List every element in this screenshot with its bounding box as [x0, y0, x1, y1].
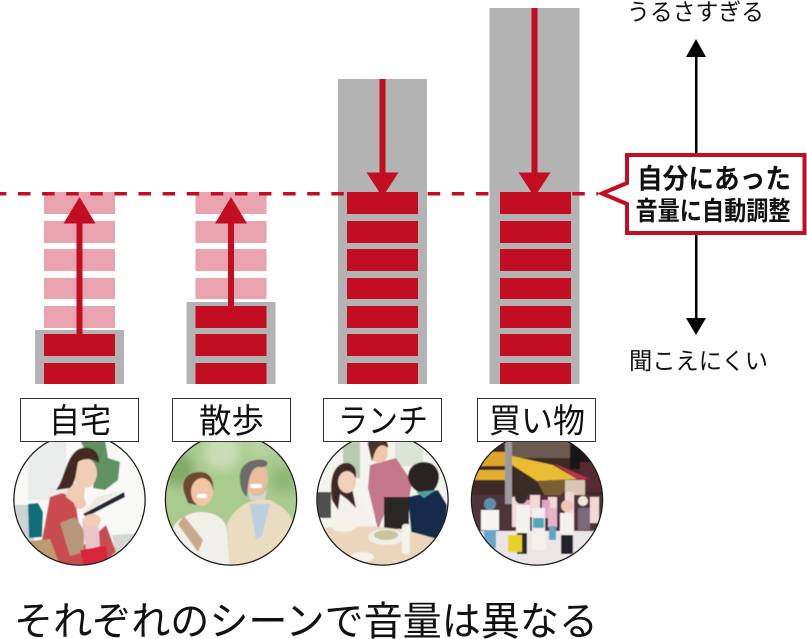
label: home: 自宅 [49, 404, 111, 440]
label: home [20, 398, 138, 442]
arrow: lunch volume down [366, 79, 398, 197]
arrow: home volume up [64, 197, 96, 334]
label: walk: 散歩 [199, 404, 264, 440]
photo: shopping street crowd [471, 434, 605, 566]
arrow: walk volume up [215, 197, 247, 306]
photo: couple walking [164, 442, 298, 566]
label: shopping: 買い物 [489, 404, 585, 440]
bar: home (自宅) [35, 192, 124, 384]
photo: woman reading at home [14, 434, 145, 570]
arrow: shopping volume down [518, 8, 550, 197]
bar: shopping (買い物) [490, 8, 580, 384]
callout: auto adjust: 自分にあった [637, 163, 791, 194]
bar: lunch (ランチ) [338, 79, 427, 384]
bar: walk (散歩) [186, 192, 276, 384]
axis label: hard to hear: 聞こえにくい [629, 348, 768, 374]
label: walk [172, 398, 290, 442]
label: lunch: ランチ [338, 404, 428, 440]
photo: lunch at a restaurant [317, 434, 448, 566]
callout: auto adjust [602, 155, 804, 233]
target level dashed line [0, 192, 598, 195]
vertical axis arrow [686, 39, 706, 335]
